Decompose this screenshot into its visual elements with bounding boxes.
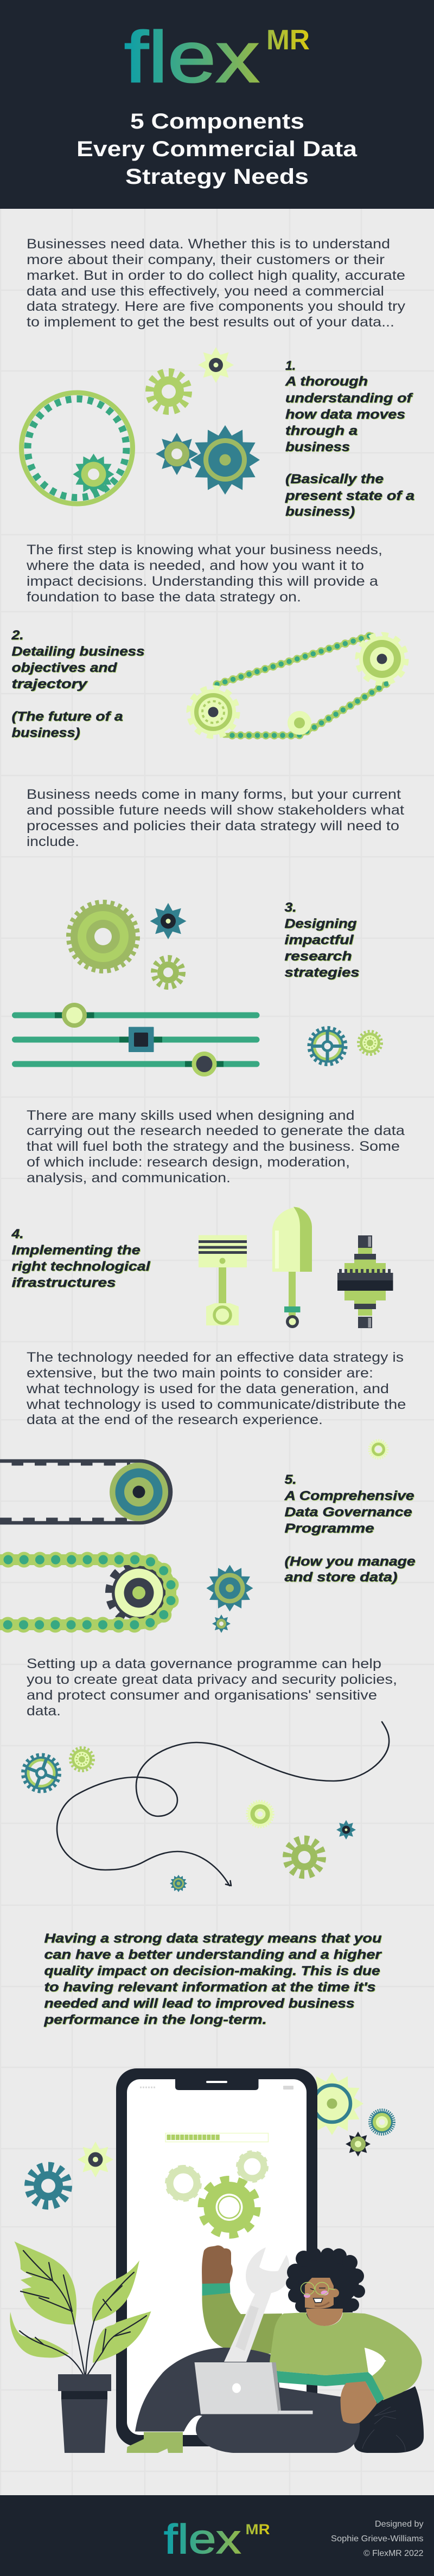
paragraph 3: [27, 1108, 405, 1186]
stems: [20, 2251, 146, 2374]
heading 4: [11, 1227, 151, 1290]
heading 3: Designing: [284, 917, 357, 931]
laptop: [194, 2362, 312, 2414]
title: 5 Components: [130, 110, 304, 133]
paragraph 4: [26, 1350, 406, 1427]
heading 1: A thorough: [285, 374, 368, 389]
footer band: [0, 2495, 434, 2576]
paragraph 3: that will fuel both the strategy and the business. Some: [27, 1139, 400, 1154]
paragraph 2: Business needs come in many forms, but your current: [27, 787, 401, 802]
heading 1: [285, 358, 414, 519]
title: [76, 110, 358, 189]
bag: [354, 2386, 424, 2453]
wrench: [224, 2247, 290, 2362]
paragraph 1: [26, 542, 382, 605]
gears right of phone: [346, 2110, 394, 2156]
paragraph 2: [27, 787, 404, 849]
lime gear: [150, 373, 188, 411]
teal big gear: [190, 425, 260, 495]
small teal gear: [170, 1875, 187, 1892]
paragraph 1: impact decisions. Understanding this will provide a: [27, 574, 378, 589]
gears left of phone: [29, 2142, 113, 2205]
heading 4: ifrastructures: [12, 1276, 116, 1290]
sweater hem: [277, 2371, 373, 2386]
intro text: more about their company, their customers or their: [27, 252, 385, 267]
teal small gear: [156, 433, 198, 475]
paragraph 1: foundation to base the data strategy on.: [27, 589, 301, 605]
paragraph 1: The first step is knowing what your business needs,: [27, 542, 382, 558]
closing statement: quality impact on decision-making. This is due: [44, 1964, 380, 1978]
potted plant: [10, 2241, 151, 2453]
heading 2: Detailing business: [12, 644, 144, 659]
logo: MR: [266, 24, 310, 56]
designer credit: Sophie Grieve-Williams: [331, 2534, 423, 2543]
heading 1: through a: [285, 424, 358, 438]
paragraph 3: carrying out the research needed to generate the data: [27, 1123, 405, 1138]
legs: [135, 2348, 360, 2453]
fist: [202, 2245, 233, 2284]
slider 2: [12, 1027, 259, 1052]
tiny teal gear: [212, 1614, 231, 1633]
heading 2: 2.: [11, 628, 24, 643]
heading 4: Implementing the: [12, 1243, 140, 1258]
sweater: [270, 2312, 422, 2400]
heading 1: (Basically the: [285, 472, 384, 486]
face: [301, 2278, 343, 2326]
section 2 illustration: chain and gears: [189, 635, 407, 736]
intro text: market. But in order to do collect high quality, accurate: [27, 268, 405, 283]
final illustration: [10, 2068, 424, 2453]
leaves: [10, 2241, 151, 2363]
closing statement: to having relevant information at the time it's: [44, 1980, 375, 1995]
heading 1: 1.: [285, 358, 296, 373]
header band: [0, 0, 434, 209]
designer credit: © FlexMR 2022: [363, 2549, 424, 2558]
heading 5: Programme: [284, 1521, 374, 1536]
intro text: data strategy. Here are five components you should try: [27, 299, 406, 314]
heading 5: [284, 1472, 416, 1585]
pale gear: [247, 1800, 273, 1828]
heading 4: right technological: [12, 1259, 151, 1274]
slider 3: [12, 1052, 259, 1076]
screen gears: [168, 2153, 266, 2235]
paragraph 5: you to create great data privacy and security policies,: [27, 1672, 397, 1687]
footer logo: [164, 2516, 270, 2562]
dark belt: [0, 1459, 173, 1524]
paragraph 5: [27, 1656, 397, 1719]
heading 1: understanding of: [285, 391, 413, 406]
green gear: [287, 1840, 322, 1874]
pot: [58, 2374, 111, 2453]
logo: [124, 17, 310, 98]
paragraph 2: and possible future needs will show stakeholders what: [27, 803, 404, 818]
chain gear: [109, 1563, 169, 1623]
paragraph 3: of which include: research design, moderation,: [27, 1155, 350, 1170]
heading 2: business): [12, 726, 80, 740]
section 6 illustration: arrow and scattered gears: [18, 1722, 389, 1892]
logo: flex: [124, 17, 259, 98]
gear shaft: [337, 1235, 393, 1328]
designer credit: [331, 2520, 424, 2558]
heading 5: 5.: [284, 1472, 296, 1487]
lime small gear: [71, 1747, 93, 1771]
heading 2: objectives and: [12, 661, 118, 675]
paragraph 1: where the data is needed, and how you want it to: [26, 558, 364, 573]
heading 3: [284, 900, 359, 980]
intro text: Businesses need data. Whether this is to understand: [27, 236, 390, 252]
sliders: [12, 1003, 259, 1076]
paragraph 4: data at the end of the research experience.: [27, 1412, 323, 1427]
bulb tool: [272, 1207, 312, 1328]
small pale gear: [369, 1440, 387, 1459]
paragraph 3: analysis, and communication.: [27, 1170, 231, 1186]
closing statement: needed and will lead to improved business: [44, 1996, 355, 2011]
phone: [116, 2068, 317, 2446]
paragraph 5: Setting up a data governance programme can help: [27, 1656, 381, 1671]
heading 5: A Comprehensive: [284, 1489, 414, 1503]
title: Every Commercial Data: [76, 137, 358, 161]
heading 3: 3.: [284, 900, 296, 915]
title: Strategy Needs: [125, 165, 309, 189]
teal gear: [150, 903, 187, 939]
heading 5: and store data): [284, 1570, 398, 1585]
paragraph 4: The technology needed for an effective data strategy is: [27, 1350, 404, 1365]
paragraph 5: data.: [27, 1703, 61, 1719]
heading 2: [11, 628, 144, 740]
cuff: [202, 2283, 230, 2296]
progress bar: [165, 2133, 268, 2142]
teal wheel gear: [18, 1750, 64, 1796]
heading 1: business: [285, 440, 350, 454]
slider 1: [12, 1003, 259, 1028]
paragraph 2: processes and policies their data strategy will need to: [27, 818, 399, 834]
paragraph 4: what technology is used for the data generation, and: [26, 1381, 389, 1396]
heading 5: Data Governance: [284, 1505, 412, 1520]
paragraph 3: There are many skills used when designing and: [27, 1108, 355, 1123]
closing statement: Having a strong data strategy means that you: [44, 1931, 382, 1946]
person: [127, 2245, 424, 2453]
section 4 illustration: machine parts: [199, 1207, 393, 1328]
pulley: [288, 711, 311, 735]
section 3 illustration: gears: [69, 902, 187, 986]
boot: [127, 2432, 183, 2453]
sleeve cuff: [366, 2376, 384, 2404]
gear behind phone: [301, 2072, 363, 2135]
section 5 illustration: belts and gears: [0, 1440, 387, 1633]
chain: [217, 635, 386, 735]
raised sleeve: [202, 2293, 282, 2354]
piston: [199, 1235, 247, 1325]
closing statement: can have a better understanding and a higher: [44, 1947, 382, 1962]
belt pulley: [110, 1463, 168, 1521]
teal gear: [206, 1565, 253, 1612]
footer logo: MR: [245, 2521, 270, 2537]
footer logo: flex: [164, 2516, 241, 2562]
heading 5: (How you manage: [284, 1554, 416, 1569]
intro text: to implement to get the best results out of your data...: [27, 315, 394, 330]
green gear: [154, 958, 182, 986]
chain: [0, 1560, 171, 1625]
hand: [341, 2381, 377, 2424]
heading 1: how data moves: [285, 407, 405, 422]
heading 2: trajectory: [12, 677, 88, 691]
heading 3: strategies: [284, 965, 359, 980]
left gear: [189, 688, 238, 736]
intro text: data and use this effectively, you need a commercial: [27, 284, 384, 299]
heading 3: impactful: [284, 933, 354, 947]
designer credit: Designed by: [375, 2520, 423, 2529]
heading 2: (The future of a: [12, 709, 123, 724]
heading 1: present state of a: [285, 489, 414, 503]
ring gear: [22, 393, 132, 504]
intro text: [27, 236, 406, 330]
curved arrow: [57, 1722, 389, 1886]
closing statement: [43, 1931, 382, 2027]
closing statement: performance in the long-term.: [43, 2013, 267, 2027]
right gear: [357, 635, 407, 683]
teal dark gear: [336, 1820, 356, 1840]
hair: [286, 2248, 365, 2312]
small gears right of sliders: [309, 1028, 382, 1064]
big gear: [69, 902, 137, 971]
section 1 illustration: gears: [22, 347, 260, 504]
heading 4: 4.: [11, 1227, 24, 1241]
paragraph 2: include.: [27, 834, 79, 849]
gear inside ring: [73, 453, 114, 495]
heading 1: business): [285, 504, 355, 519]
pale gear: [198, 347, 234, 383]
paragraph 4: what technology is used to communicate/distribute the: [26, 1397, 406, 1412]
paragraph 5: and protect consumer and organisations' sensitive: [27, 1688, 377, 1703]
paragraph 4: extensive, but the two main points to consider are:: [27, 1366, 373, 1381]
heading 3: research: [284, 949, 352, 964]
